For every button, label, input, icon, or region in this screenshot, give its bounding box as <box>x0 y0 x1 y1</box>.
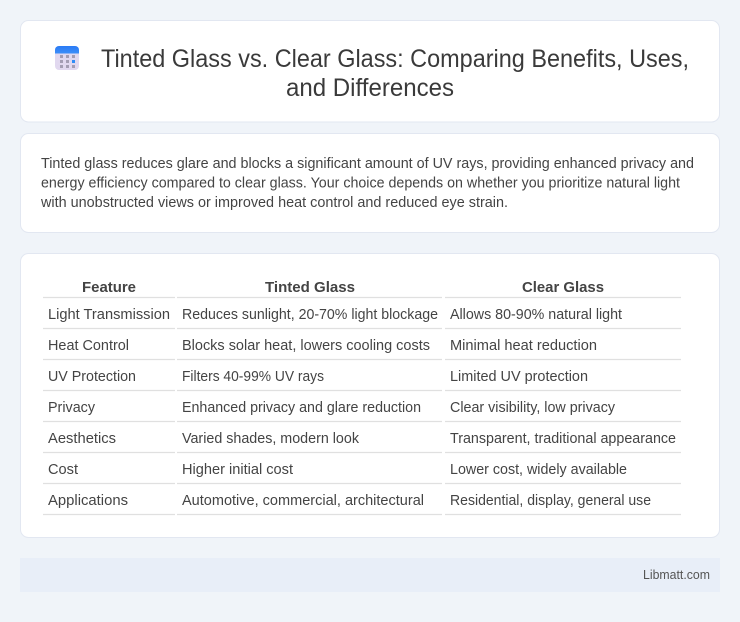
table header <box>82 279 604 296</box>
title: and Differences <box>286 74 454 102</box>
row: heat control: Blocks solar heat, lowers cooling costs <box>182 338 430 354</box>
panel: summary text: Tinted glass reduces glare and blocks a significant amount of UV rays, providing enhanced privacy and <box>41 156 694 172</box>
row: privacy: Privacy <box>48 400 96 416</box>
panel: summary text: energy efficiency compared to clear glass. Your choice depends on whether you prioritize natural light <box>41 176 680 192</box>
row: privacy <box>48 400 616 416</box>
icon: calendar <box>55 46 79 70</box>
row: heat control: Heat Control <box>48 338 129 354</box>
footer bar: Libmatt.com <box>643 568 710 582</box>
table header: Feature <box>82 279 136 296</box>
row: privacy: Clear visibility, low privacy <box>450 400 616 416</box>
row: applications: Applications <box>48 493 128 509</box>
row: heat control: Minimal heat reduction <box>450 338 597 354</box>
row: uv protection: Filters 40-99% UV rays <box>182 369 324 385</box>
row: applications: Residential, display, general use <box>450 493 651 509</box>
row: aesthetics <box>48 431 676 447</box>
panel: summary text <box>20 134 720 232</box>
panel: comparison table <box>20 254 720 538</box>
row: cost <box>48 462 627 478</box>
row: privacy: Enhanced privacy and glare reduction <box>182 400 421 416</box>
row: light transmission: Light Transmission <box>48 307 170 323</box>
row: uv protection: Limited UV protection <box>450 369 588 385</box>
row: uv protection: UV Protection <box>48 369 136 385</box>
title: Tinted Glass vs. Clear Glass: Comparing Benefits, Uses, <box>101 45 689 73</box>
row: heat control <box>48 338 597 354</box>
table header: Clear Glass <box>522 279 604 296</box>
row: uv protection <box>48 369 588 385</box>
row: cost: Higher initial cost <box>182 462 293 478</box>
row: light transmission: Allows 80-90% natural light <box>450 307 622 323</box>
row: cost: Lower cost, widely available <box>450 462 627 478</box>
table header: Tinted Glass <box>265 279 355 296</box>
title <box>101 45 689 102</box>
row: aesthetics: Aesthetics <box>48 431 116 447</box>
row: cost: Cost <box>48 462 78 478</box>
panel: summary text: with unobstructed views or improved heat control and reduced eye strain. <box>40 195 508 211</box>
footer bar <box>20 558 720 592</box>
row: aesthetics: Varied shades, modern look <box>182 431 360 447</box>
row: aesthetics: Transparent, traditional appearance <box>450 431 676 447</box>
row: applications <box>48 493 651 509</box>
panel: title card <box>20 20 720 122</box>
row: light transmission: Reduces sunlight, 20-70% light blockage <box>182 307 438 323</box>
row: light transmission <box>48 307 622 323</box>
row: applications: Automotive, commercial, architectural <box>182 493 424 509</box>
